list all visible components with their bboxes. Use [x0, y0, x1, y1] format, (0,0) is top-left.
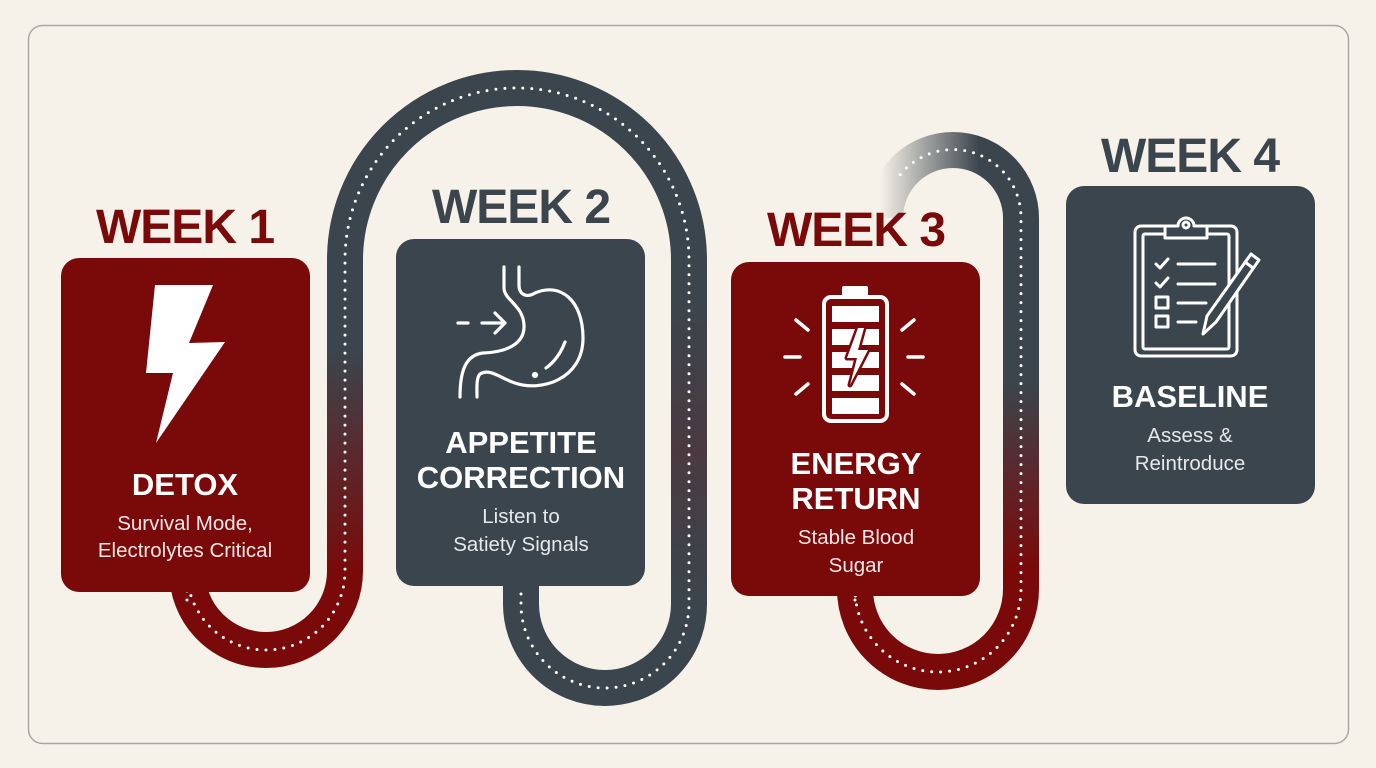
text: baseline: BASELINE: [1112, 379, 1268, 414]
text: baseline description: Reintroduce: [1135, 452, 1245, 475]
icon: stomach: [458, 267, 583, 397]
heading: week 4: WEEK 4: [1101, 130, 1280, 183]
text: appetite description: Satiety Signals: [453, 533, 589, 556]
heading: week 2: WEEK 2: [432, 181, 610, 234]
icon: lightning bolt: [146, 285, 225, 443]
text: appetite correction: CORRECTION: [417, 460, 625, 495]
text: energy return: RETURN: [791, 481, 921, 516]
panel: week 2 appetite: [396, 239, 645, 586]
text: energy return: ENERGY: [791, 446, 922, 481]
text: energy description: Stable Blood: [798, 526, 914, 549]
heading: week 3: WEEK 3: [767, 204, 945, 257]
text: detox description: Electrolytes Critical: [98, 539, 272, 562]
panel: week 3 energy: [731, 262, 980, 596]
text: energy description: Sugar: [829, 554, 884, 577]
panel: week 1 detox: [61, 258, 310, 592]
text: detox description: Survival Mode,: [117, 512, 253, 535]
heading: week 1: WEEK 1: [96, 201, 274, 254]
icon: clipboard: [1135, 218, 1259, 356]
text: baseline description: Assess &: [1147, 424, 1233, 447]
text: appetite description: Listen to: [482, 505, 560, 528]
road: week3 to week4: [855, 150, 1021, 672]
text: detox: DETOX: [132, 467, 238, 502]
road: week1 to week2: [187, 88, 689, 688]
icon: battery: [785, 286, 923, 421]
text: appetite correction: APPETITE: [445, 425, 597, 460]
panel: week 4 baseline: [1066, 186, 1315, 504]
